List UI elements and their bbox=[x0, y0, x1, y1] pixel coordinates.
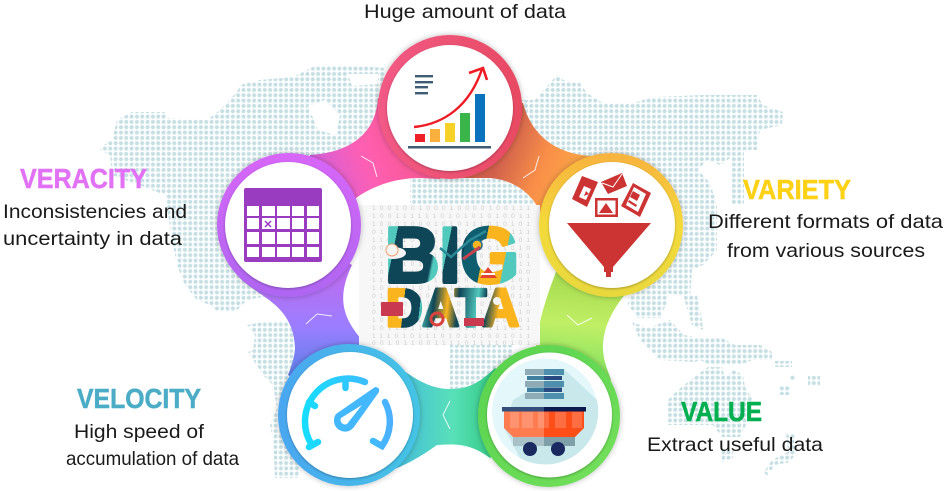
description: veracity: Inconsistencies and bbox=[3, 201, 187, 223]
ring band connecting the five circles bbox=[235, 98, 633, 472]
circle: velocity bbox=[278, 344, 420, 486]
band: value to velocity bbox=[349, 354, 549, 472]
BIG DATA lettering bbox=[385, 211, 519, 338]
band: variety to value bbox=[536, 225, 633, 415]
binary background: 010110101001110101011 bbox=[372, 261, 530, 268]
label: variety bbox=[708, 174, 943, 262]
binary background: 100100100010000100111 bbox=[372, 205, 530, 212]
circle: veracity bbox=[217, 153, 361, 297]
BIG DATA lettering: DATA bbox=[386, 279, 519, 338]
binary background: 101101110101100111011 bbox=[372, 325, 530, 332]
binary background: 110010101000110101001 bbox=[372, 237, 530, 244]
description: variety: Different formats of data bbox=[708, 211, 943, 233]
lettering decorations bbox=[380, 231, 501, 326]
heading: value: VALUE bbox=[681, 396, 762, 427]
band: veracity to volume bbox=[289, 98, 450, 225]
binary background: 100101010111010111011 bbox=[372, 285, 530, 292]
dotted world map bbox=[100, 65, 820, 478]
label: veracity bbox=[3, 163, 187, 250]
binary background: 100010001010111010101 bbox=[372, 221, 530, 228]
label: value bbox=[647, 396, 823, 456]
binary background: 111010111010101001011 bbox=[372, 333, 530, 340]
binary background: 100101011010010101100 bbox=[372, 269, 530, 276]
heading: veracity: VERACITY bbox=[20, 163, 147, 194]
description: veracity bbox=[3, 201, 187, 250]
central Big Data panel bbox=[359, 205, 540, 347]
label: velocity bbox=[66, 383, 239, 470]
binary background: 010110100101011001010 bbox=[372, 293, 530, 300]
binary background: 001101010110101011010 bbox=[372, 245, 530, 252]
icon: growth bar chart bbox=[408, 68, 491, 148]
binary background: 001011001111011110101 bbox=[372, 340, 530, 347]
band: velocity to veracity bbox=[235, 225, 362, 415]
heading: velocity: VELOCITY bbox=[77, 383, 201, 414]
band: volume to variety bbox=[450, 103, 611, 225]
direction chevrons bbox=[306, 156, 592, 429]
binary background: 101001011010100110101 bbox=[372, 301, 530, 308]
label: volume: Huge amount of data bbox=[364, 1, 566, 23]
icon: calendar table bbox=[244, 188, 322, 262]
description: value: Extract useful data bbox=[647, 434, 823, 456]
binary background: 100101101001010110101 bbox=[372, 317, 530, 324]
description: velocity bbox=[66, 421, 239, 470]
binary background: 100111111010101010011 bbox=[372, 213, 530, 220]
binary background: 010101101011101010111 bbox=[372, 229, 530, 236]
BIG DATA lettering: BIG bbox=[385, 211, 519, 299]
description: veracity: uncertainty in data bbox=[3, 228, 182, 250]
binary background bbox=[372, 205, 530, 347]
description: variety: from various sources bbox=[727, 240, 925, 262]
circle: volume bbox=[378, 35, 522, 179]
description: variety bbox=[708, 211, 943, 262]
description: velocity: High speed of bbox=[74, 421, 205, 443]
binary background: 011010100110101010010 bbox=[372, 309, 530, 316]
icon: funnel with files bbox=[567, 173, 651, 277]
heading: variety: VARIETY bbox=[743, 174, 851, 205]
binary background: 101010011101010100101 bbox=[372, 253, 530, 260]
circle: value bbox=[478, 345, 620, 487]
description: velocity: accumulation of data bbox=[66, 448, 239, 470]
icon: data mining cart bbox=[492, 358, 598, 464]
icon: speedometer bbox=[305, 379, 390, 447]
circle: variety bbox=[539, 153, 683, 297]
binary background: 110101001011010110101 bbox=[372, 277, 530, 284]
